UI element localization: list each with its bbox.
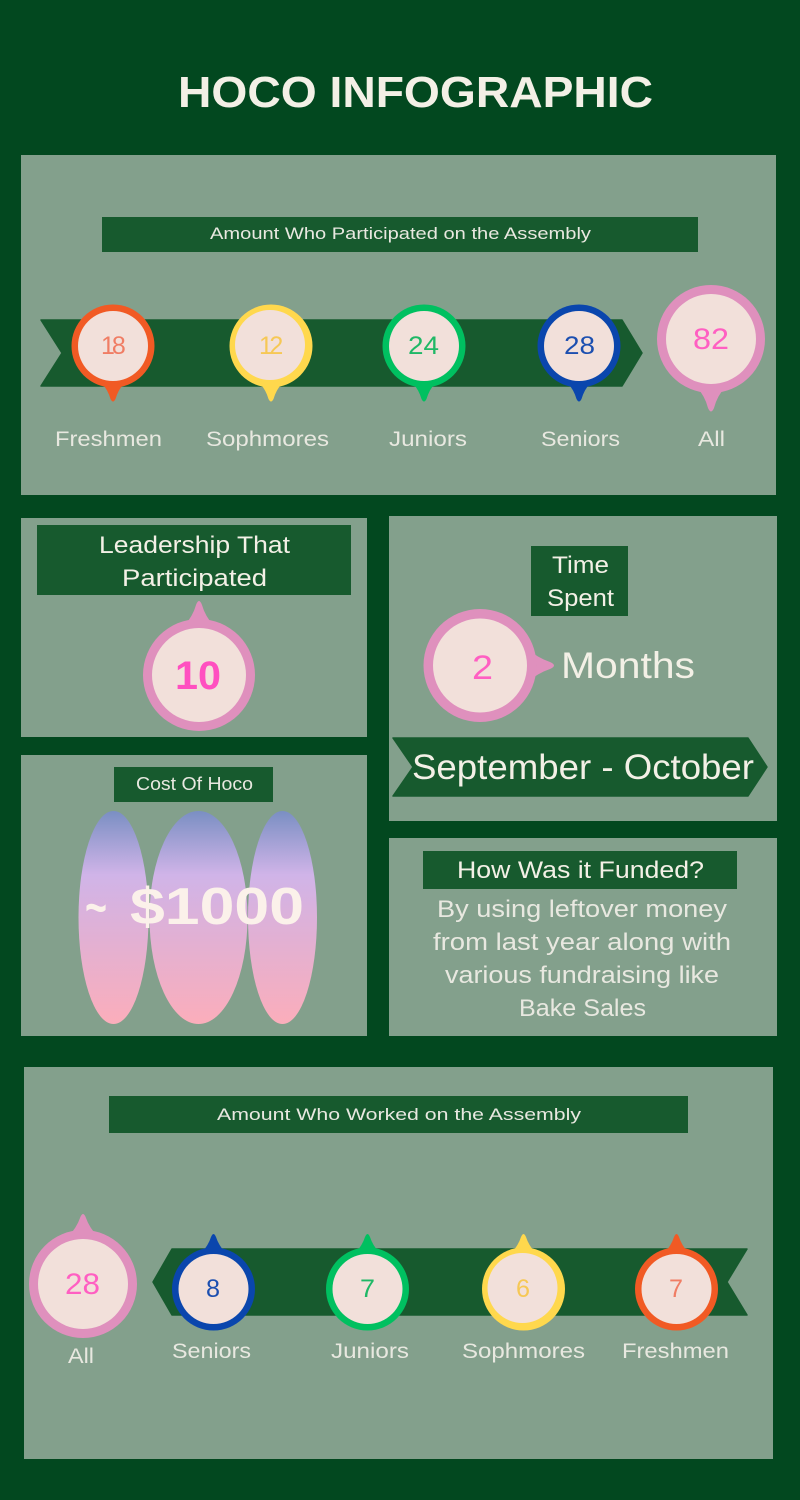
marker: all 82 bbox=[657, 285, 765, 412]
marker: 2 months: 2 bbox=[472, 649, 493, 687]
heading: cost: Cost Of Hoco bbox=[136, 774, 253, 794]
arrow ribbon: september to october bbox=[393, 738, 767, 796]
label: freshmen: Freshmen bbox=[622, 1340, 729, 1363]
marker: seniors 8 bbox=[172, 1234, 255, 1330]
label: sophomores: Sophmores bbox=[462, 1340, 585, 1363]
heading: participated: Amount Who Participated on the Assembly bbox=[210, 224, 592, 243]
text: funding description bbox=[433, 896, 731, 1022]
marker: sophomores 12 bbox=[230, 304, 312, 402]
amount: about 1000 dollars bbox=[85, 878, 304, 937]
heading: time spent: Time bbox=[552, 552, 609, 579]
arrow ribbon: participated bbox=[41, 320, 642, 386]
heading: time spent bbox=[531, 546, 628, 616]
heading: funded: How Was it Funded? bbox=[457, 857, 704, 884]
marker: leadership 10: 10 bbox=[175, 654, 221, 698]
text: funding description: various fundraising like bbox=[445, 962, 719, 989]
marker: all 28 bbox=[29, 1214, 137, 1338]
marker: seniors 28 bbox=[538, 304, 620, 402]
label: juniors: Juniors bbox=[389, 428, 467, 451]
heading: cost bbox=[114, 767, 273, 802]
amount: about 1000 dollars: $1000 bbox=[130, 878, 304, 936]
marker: seniors 8: 8 bbox=[206, 1275, 220, 1303]
panel: amount who participated bbox=[21, 155, 776, 495]
label: sophomores: Sophmores bbox=[206, 428, 329, 451]
label: all: All bbox=[698, 428, 725, 451]
marker: freshmen 18: 18 bbox=[101, 332, 125, 360]
label: juniors: Juniors bbox=[331, 1340, 409, 1363]
marker: sophomores 6: 6 bbox=[516, 1275, 530, 1303]
arrow ribbon: september to october: September - October bbox=[412, 748, 754, 787]
marker: all 82: 82 bbox=[693, 323, 729, 356]
panel: time spent bbox=[389, 516, 777, 821]
heading: worked bbox=[109, 1096, 688, 1133]
marker: freshmen 18 bbox=[72, 304, 154, 402]
marker: seniors 28: 28 bbox=[564, 332, 595, 360]
panel: how was it funded bbox=[389, 838, 777, 1036]
heading: leadership: Participated bbox=[122, 565, 267, 592]
heading: funded bbox=[423, 851, 737, 889]
heading: leadership bbox=[37, 525, 351, 595]
marker: freshmen 7 bbox=[635, 1234, 718, 1330]
label: seniors: Seniors bbox=[541, 428, 620, 451]
text: months: Months bbox=[561, 645, 695, 686]
marker: juniors 7: 7 bbox=[360, 1275, 375, 1303]
text: funding description: Bake Sales bbox=[519, 995, 646, 1022]
heading: worked: Amount Who Worked on the Assembly bbox=[217, 1105, 582, 1124]
label: seniors: Seniors bbox=[172, 1340, 251, 1363]
marker: juniors 24 bbox=[382, 304, 466, 402]
marker: freshmen 7: 7 bbox=[669, 1275, 683, 1303]
heading: time spent: Spent bbox=[547, 585, 614, 612]
amount: about 1000 dollars: ~ bbox=[85, 879, 107, 937]
label: freshmen: Freshmen bbox=[55, 428, 162, 451]
marker: sophomores 6 bbox=[482, 1234, 565, 1330]
panel: amount who worked bbox=[24, 1067, 773, 1459]
heading: leadership: Leadership That bbox=[99, 532, 290, 559]
marker: leadership 10 bbox=[143, 601, 255, 731]
title: HOCO INFOGRAPHIC bbox=[178, 68, 653, 117]
panel: leadership bbox=[21, 518, 367, 737]
panel: cost of hoco bbox=[21, 755, 367, 1036]
text: funding description: By using leftover money bbox=[437, 896, 727, 923]
gradient ovals bbox=[78, 811, 317, 1024]
marker: juniors 7 bbox=[326, 1234, 409, 1330]
text: funding description: from last year along with bbox=[433, 929, 731, 956]
marker: juniors 24: 24 bbox=[408, 332, 439, 360]
marker: 2 months bbox=[424, 609, 554, 722]
heading: participated bbox=[102, 217, 698, 252]
arrow ribbon: worked bbox=[153, 1249, 747, 1315]
marker: all 28: 28 bbox=[65, 1268, 100, 1301]
label: all: All bbox=[68, 1345, 94, 1368]
marker: sophomores 12: 12 bbox=[259, 332, 282, 360]
